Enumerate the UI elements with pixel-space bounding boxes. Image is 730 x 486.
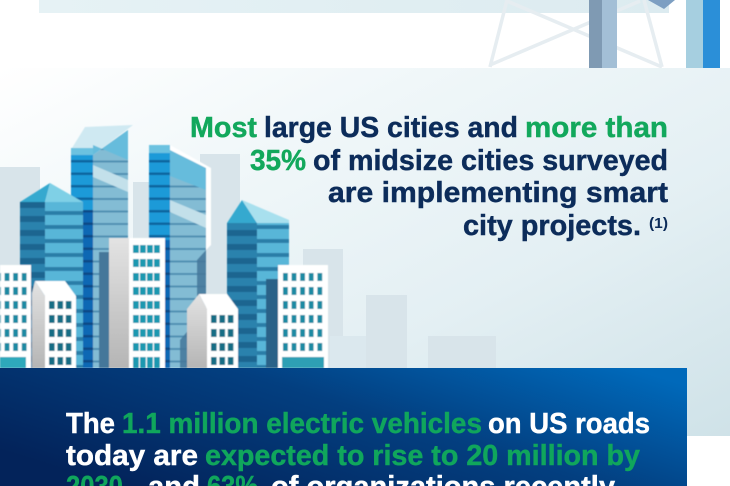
text block: electric vehicles statistic: 1.1 million electric vehicles bbox=[122, 408, 482, 440]
text block: electric vehicles statistic: today are bbox=[66, 440, 198, 472]
panel: electric vehicles bbox=[0, 368, 687, 486]
text block: smart city statistic: large US cities and bbox=[264, 112, 518, 144]
text block: smart city statistic: 35% bbox=[250, 145, 306, 177]
building: white tower far left bbox=[0, 265, 31, 368]
icon: transmission tower bbox=[490, 0, 720, 68]
building: tall tower right bbox=[149, 145, 211, 368]
top band bbox=[39, 0, 669, 13]
text block: smart city statistic: of midsize cities surveyed bbox=[313, 145, 668, 177]
building: right hex tower bbox=[227, 200, 289, 368]
text block: smart city statistic: city projects. bbox=[463, 210, 641, 242]
text block: smart city statistic: are implementing smart bbox=[328, 177, 668, 209]
text block: smart city statistic bbox=[190, 112, 668, 242]
text block: smart city statistic: (1) bbox=[649, 215, 668, 232]
text block: electric vehicles statistic: expected to rise to 20 million by bbox=[205, 440, 640, 472]
illustration: city skyline bbox=[0, 125, 328, 368]
building: central white tower bbox=[109, 238, 165, 368]
text block: smart city statistic: Most bbox=[190, 112, 257, 144]
building: tall tower left bbox=[71, 125, 133, 368]
building: small house left bbox=[32, 281, 76, 368]
building: small house right bbox=[187, 294, 238, 368]
text block: electric vehicles statistic: The bbox=[66, 408, 115, 440]
text block: electric vehicles statistic bbox=[66, 408, 650, 486]
background skyline bbox=[0, 154, 496, 368]
building: white tower right bbox=[278, 265, 328, 368]
text block: smart city statistic: more than bbox=[525, 112, 668, 144]
building: left hex tower bbox=[20, 183, 83, 368]
text block: electric vehicles statistic: on US roads bbox=[488, 408, 650, 440]
panel: smart cities background bbox=[0, 68, 730, 436]
